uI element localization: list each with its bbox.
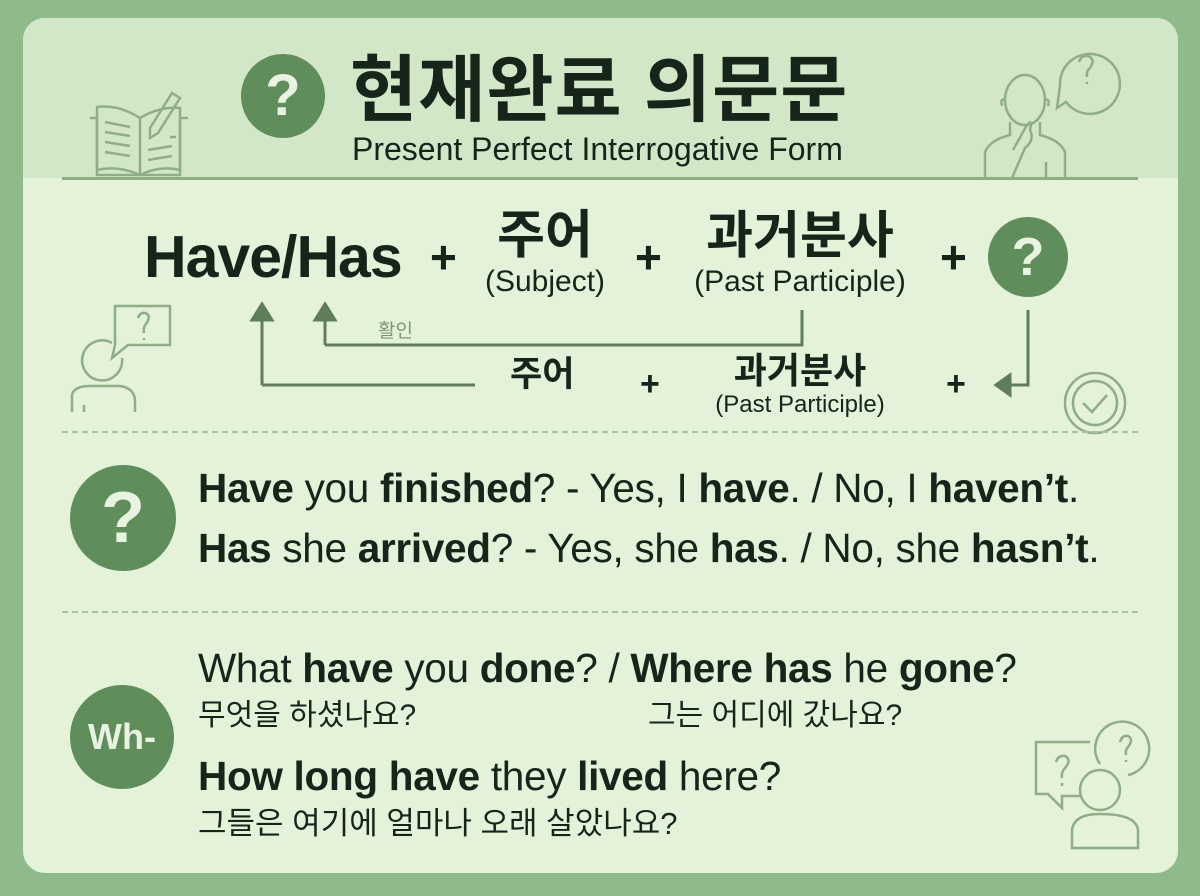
icon: person with question	[70, 304, 172, 412]
icon: Wh circle	[70, 685, 174, 789]
past participle: (Past Participle)	[715, 391, 885, 418]
arrow label: 활인	[378, 321, 413, 342]
title: 현재완료 의문문	[350, 50, 848, 131]
plus: +	[635, 231, 662, 283]
wh example 2: How long have they lived here?	[198, 753, 781, 799]
plus: +	[940, 231, 967, 283]
second formula row	[510, 350, 966, 418]
past participle	[715, 350, 885, 418]
header band	[23, 18, 1178, 178]
icon: Wh circle: Wh-	[88, 716, 156, 757]
formula: subject: 주어	[497, 207, 593, 265]
formula: past participle	[694, 207, 906, 298]
header divider	[62, 177, 1138, 180]
plus: +	[430, 231, 457, 283]
yes/no section	[70, 465, 1099, 571]
wh section	[70, 645, 1017, 841]
formula: past participle: (Past Participle)	[694, 265, 906, 298]
icon: check badge	[1064, 372, 1126, 434]
example 1: Have you finished? - Yes, I have. / No, I haven’t.	[198, 465, 1079, 511]
formula	[144, 207, 967, 298]
formula question circle: ?	[1012, 227, 1044, 287]
past participle: 과거분사	[734, 350, 866, 391]
formula: subject	[485, 207, 605, 298]
translation 2: 그는 어디에 갔나요?	[648, 699, 902, 732]
icon: speech bubbles person	[1034, 720, 1150, 850]
title icon: question circle	[241, 54, 325, 138]
dashed divider	[62, 431, 1138, 433]
formula question circle	[988, 217, 1068, 297]
formula: Have/Has: Have/Has	[144, 224, 402, 290]
title icon: question circle: ?	[265, 63, 301, 128]
subtitle: Present Perfect Interrogative Form	[352, 131, 843, 167]
icon: book and pencil	[90, 91, 188, 176]
dashed divider	[62, 611, 1138, 613]
translation 1: 무엇을 하셨나요?	[198, 699, 416, 732]
example 2: Has she arrived? - Yes, she has. / No, she hasn’t.	[198, 525, 1099, 571]
icon: question circle: ?	[101, 478, 145, 558]
plus: +	[946, 365, 966, 403]
icon: question circle	[70, 465, 176, 571]
arrows	[249, 301, 1030, 398]
icon: thinking person	[984, 52, 1122, 177]
formula: past participle: 과거분사	[706, 207, 894, 264]
subject: 주어	[510, 355, 574, 394]
translation 3: 그들은 여기에 얼마나 오래 살았나요?	[198, 806, 678, 841]
formula: subject: (Subject)	[485, 265, 605, 298]
wh example 1: What have you done? / Where has he gone?	[198, 645, 1017, 691]
plus: +	[640, 365, 660, 403]
